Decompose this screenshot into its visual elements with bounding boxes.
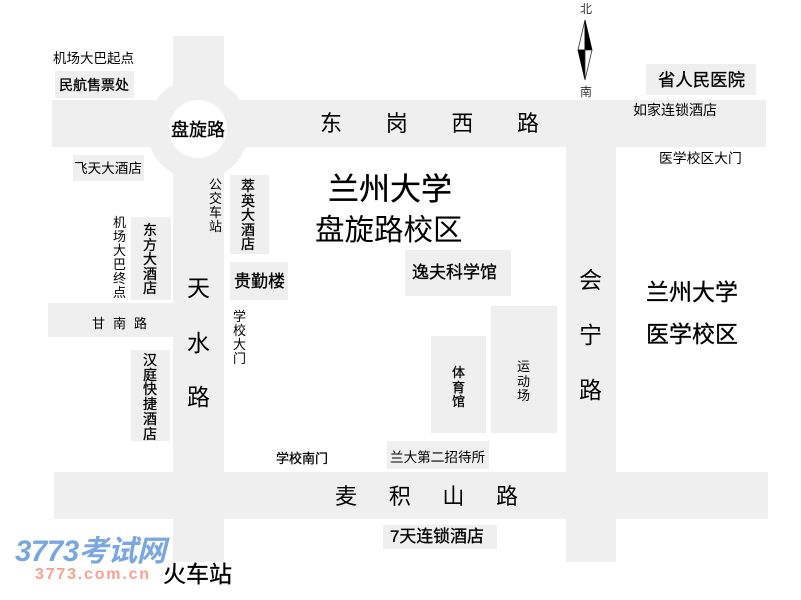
heading: Lanzhou University medical campus: 兰州大学 [646, 279, 738, 305]
heading: Panxuan Road Campus: 盘旋路校区 [315, 214, 463, 247]
label: school main gate: 学校大门 [233, 309, 246, 366]
label: Hanting Express Hotel [131, 350, 170, 441]
watermark: site URL: 3773.com.cn [35, 566, 151, 583]
heading: Lanzhou University: 兰州大学 [328, 172, 452, 207]
label: provincial hospital: 省人民医院 [658, 70, 745, 90]
label: civil aviation ticket office [55, 71, 134, 98]
label: airport bus start: 机场大巴起点 [53, 51, 134, 66]
label: civil aviation ticket office: 民航售票处 [59, 77, 129, 93]
label: Feitian Hotel: 飞天大酒店 [74, 161, 142, 176]
label: Feitian Hotel [73, 155, 144, 181]
label: gymnasium: 体育馆 [452, 365, 465, 409]
heading: medical campus: 医学校区 [646, 321, 738, 347]
label: Cuiying Hotel: 萃英大酒店 [241, 178, 255, 252]
label: south gate: 学校南门 [276, 451, 328, 466]
road: Huining Road [566, 147, 616, 562]
label: Tianshui Road name: 天水路 [187, 275, 210, 410]
label: Donggang West Road name: 东岗西路 [320, 111, 583, 136]
label: provincial hospital [646, 64, 756, 95]
label: Dongfang Hotel: 东方大酒店 [143, 222, 157, 296]
label: sports field [491, 306, 557, 433]
label: sports field: 运动场 [517, 359, 530, 403]
label: Dongfang Hotel [131, 217, 171, 300]
label: gymnasium [431, 336, 486, 433]
road: Donggang West Road [52, 100, 766, 147]
label: Huining Road name: 会宁路 [579, 267, 602, 403]
road: Tianshui Road [173, 36, 224, 562]
road: Maijishan Road [54, 472, 768, 519]
label: roundabout name: 盘旋路 [171, 120, 225, 140]
road: Gannan Road [48, 303, 173, 337]
label: 7 Days Inn [383, 525, 497, 549]
label: Home Inn: 如家连锁酒店 [633, 102, 717, 118]
label: Maijishan Road name: 麦积山路 [335, 484, 550, 509]
watermark: 3773 exam site logo: 3773考试网 [15, 535, 166, 568]
label: railway station: 火车站 [163, 561, 232, 587]
label: Yifu Science Building: 逸夫科学馆 [412, 263, 497, 282]
label: bus stop: 公交车站 [209, 177, 222, 234]
label: Guiqin Building: 贵勤楼 [234, 272, 285, 291]
label: Yifu Science Building [405, 250, 511, 296]
label: second guest house: 兰大第二招待所 [390, 450, 485, 465]
label: second guest house [387, 441, 489, 469]
compass south label: 南 [580, 85, 592, 99]
label: 7 Days Inn: 7天连锁酒店 [390, 527, 484, 546]
label: medical campus gate: 医学校区大门 [659, 151, 742, 166]
label: Gannan Road name: 甘南路 [92, 316, 155, 331]
label: airport bus terminal: 机场大巴终点 [113, 215, 126, 300]
label: Guiqin Building [230, 262, 288, 300]
compass north label: 北 [580, 2, 592, 16]
roundabout [147, 78, 249, 180]
label: Hanting Express Hotel: 汉庭快捷酒店 [143, 352, 157, 442]
label: Cuiying Hotel [230, 175, 269, 254]
